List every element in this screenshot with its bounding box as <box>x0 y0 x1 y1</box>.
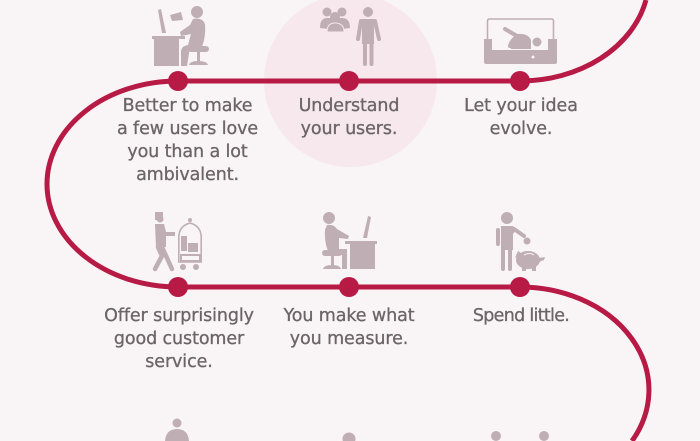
text: you make what you measure <box>283 306 415 349</box>
text: offer surprisingly good customer service: service. <box>145 352 213 372</box>
text: offer surprisingly good customer service: good customer <box>114 329 244 349</box>
text: better to make a few users love you <box>117 96 258 185</box>
icon: partial two people, bottom right <box>491 431 549 441</box>
text: better to make a few users love you: ambivalent. <box>136 165 239 185</box>
text: understand your users: your users. <box>301 119 397 139</box>
icon: group of users and a person <box>320 7 379 64</box>
icon: person at desk with money <box>152 6 209 66</box>
text: you make what you measure: You make what <box>283 306 415 326</box>
text: let your idea evolve: evolve. <box>490 119 552 139</box>
text: let your idea evolve <box>464 96 578 139</box>
icon: partial person, bottom left <box>165 418 189 441</box>
icon: person working at computer <box>322 212 377 269</box>
text: better to make a few users love you: Better to make <box>123 96 252 116</box>
text: better to make a few users love you: a few users love <box>117 119 258 139</box>
text: better to make a few users love you: you than a lot <box>127 142 248 162</box>
highlight circle behind Understand your users <box>264 0 437 167</box>
timeline nodes <box>168 71 530 297</box>
icon: bellhop with luggage cart <box>155 212 201 270</box>
text: you make what you measure: you measure. <box>290 329 408 349</box>
text: offer surprisingly good customer service <box>104 306 254 372</box>
icon: person with piggy bank <box>498 212 545 271</box>
text: let your idea evolve: Let your idea <box>464 96 578 116</box>
text: offer surprisingly good customer service: Offer surprisingly <box>104 306 254 326</box>
icon: partial person, bottom centre <box>342 432 356 441</box>
text: spend little: Spend little. <box>473 306 569 326</box>
icon: baby in a crib <box>484 19 557 64</box>
text: understand your users <box>299 96 399 139</box>
text: understand your users: Understand <box>299 96 399 116</box>
